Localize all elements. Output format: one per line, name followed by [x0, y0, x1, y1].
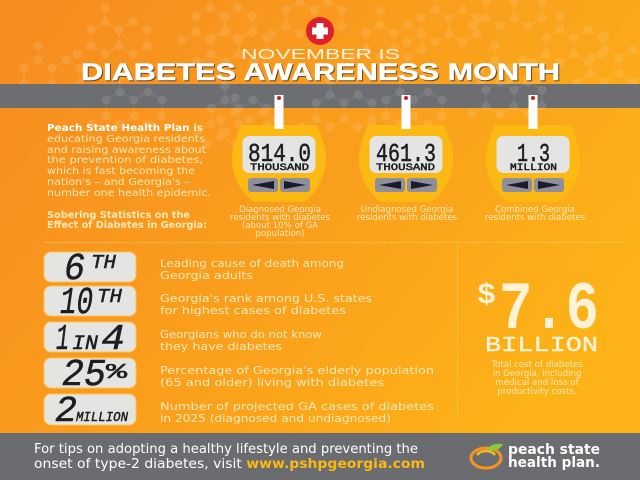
- stat: 6th: Leading cause of death among: [160, 258, 344, 270]
- stat: 10th: 10: [60, 282, 93, 325]
- meter: combined: residents with diabetes: [485, 213, 586, 223]
- callout: total cost: productivity costs.: [497, 387, 577, 397]
- meter: undiagnosed: Undiagnosed Georgia: [361, 205, 453, 215]
- stat: 1 in 4: they have diabetes: [160, 341, 282, 353]
- stat: 6th: TH: [91, 252, 117, 274]
- intro text: Sobering Statistics on the: [47, 210, 190, 221]
- stat: 10th: TH: [97, 286, 123, 308]
- intro text: and raising awareness about: [47, 145, 206, 156]
- stat: 1 in 4: 1: [56, 319, 69, 360]
- wordmark: peach state: [508, 442, 600, 458]
- callout: total cost: $: [477, 279, 496, 312]
- meter: undiagnosed: [357, 95, 458, 223]
- intro text: which is fast becoming the: [47, 166, 195, 177]
- intro text: [47, 123, 211, 231]
- stat: 2 million: MILLION: [76, 410, 129, 426]
- meter: combined: MILLION: [510, 163, 557, 174]
- stat: 10th: [44, 282, 372, 325]
- footer text: onset of type-2 diabetes, visit www.pshpgeorgia.com: [34, 457, 425, 472]
- stat: 1 in 4: 4: [101, 319, 125, 360]
- intro text: the prevention of diabetes,: [47, 155, 203, 166]
- stat: 25 percent: (65 and older) living with diabetes: [160, 377, 384, 389]
- callout: total cost: Total cost of diabetes: [490, 360, 583, 370]
- icon: peach: [471, 444, 503, 468]
- stat: 25 percent: [44, 354, 434, 397]
- header molecule pattern: [6, 0, 640, 96]
- meter: undiagnosed: 461.3: [376, 139, 436, 169]
- meter: undiagnosed: THOUSAND: [376, 163, 435, 174]
- callout: total cost: medical and loss of: [495, 378, 580, 388]
- footer text: [34, 442, 425, 472]
- meter: diagnosed: residents with diabetes: [230, 213, 331, 223]
- stat: 25 percent: %: [106, 362, 128, 385]
- dotted dividers: [44, 242, 625, 420]
- stat: 2 million: [44, 391, 434, 432]
- intro text: nation's – and Georgia's –: [47, 177, 190, 188]
- footer bar: [0, 433, 640, 480]
- icon: medical cross: [306, 17, 334, 45]
- stat: 1 in 4: [44, 319, 322, 360]
- callout: total cost: BILLION: [485, 335, 598, 358]
- meter: combined: [485, 95, 586, 223]
- band molecule pattern: [88, 64, 546, 148]
- stat: 2 million: in 2025 (diagnosed and undiagnosed): [160, 413, 391, 425]
- callout: total cost: 7.6: [499, 272, 599, 349]
- intro text: educating Georgia residents: [47, 134, 205, 145]
- meter: diagnosed: (about 10% of GA: [242, 221, 318, 231]
- meter: combined: Combined Georgia: [495, 205, 575, 215]
- title: [81, 46, 560, 86]
- logo: peach state health plan: [471, 442, 600, 471]
- meter: undiagnosed: residents with diabetes: [357, 213, 458, 223]
- stat: 6th: 6: [64, 248, 85, 291]
- intro text: Peach State Health Plan is: [47, 123, 203, 134]
- stat: 6th: Georgia adults: [160, 270, 253, 282]
- stat: 6th: [44, 248, 344, 291]
- intro text: number one health epidemic.: [47, 188, 211, 199]
- stat: 2 million: 2: [55, 391, 77, 432]
- meter: combined: 1.3: [517, 139, 550, 169]
- stat: 10th: for highest cases of diabetes: [160, 305, 346, 317]
- meter: diagnosed: population): [255, 229, 305, 239]
- title line two: DIABETES AWARENESS MONTH: [81, 59, 560, 86]
- meter: diagnosed: [230, 95, 331, 239]
- meter: diagnosed: Diagnosed Georgia: [239, 205, 321, 215]
- meter: diagnosed: THOUSAND: [250, 163, 309, 174]
- stat: 25 percent: Percentage of Georgia's elderly population: [160, 365, 434, 377]
- logo: peach state health plan: health plan.: [508, 455, 600, 471]
- meter: diagnosed: 814.0: [248, 139, 311, 169]
- title line one: NOVEMBER IS: [241, 46, 400, 63]
- footer text: For tips on adopting a healthy lifestyle and preventing the: [34, 442, 418, 457]
- stat: 10th: Georgia's rank among U.S. states: [160, 293, 372, 305]
- stat: 1 in 4: Georgians who do not know: [160, 329, 322, 341]
- callout: total cost: [477, 272, 599, 397]
- stat: 25 percent: 25: [62, 354, 106, 397]
- callout: total cost: in Georgia, including: [493, 369, 581, 379]
- stat: 2 million: Number of projected GA cases of diabetes: [160, 401, 434, 413]
- intro text: Effect of Diabetes in Georgia:: [47, 220, 207, 231]
- stat: 1 in 4: IN: [72, 333, 98, 356]
- gray band: [0, 84, 640, 108]
